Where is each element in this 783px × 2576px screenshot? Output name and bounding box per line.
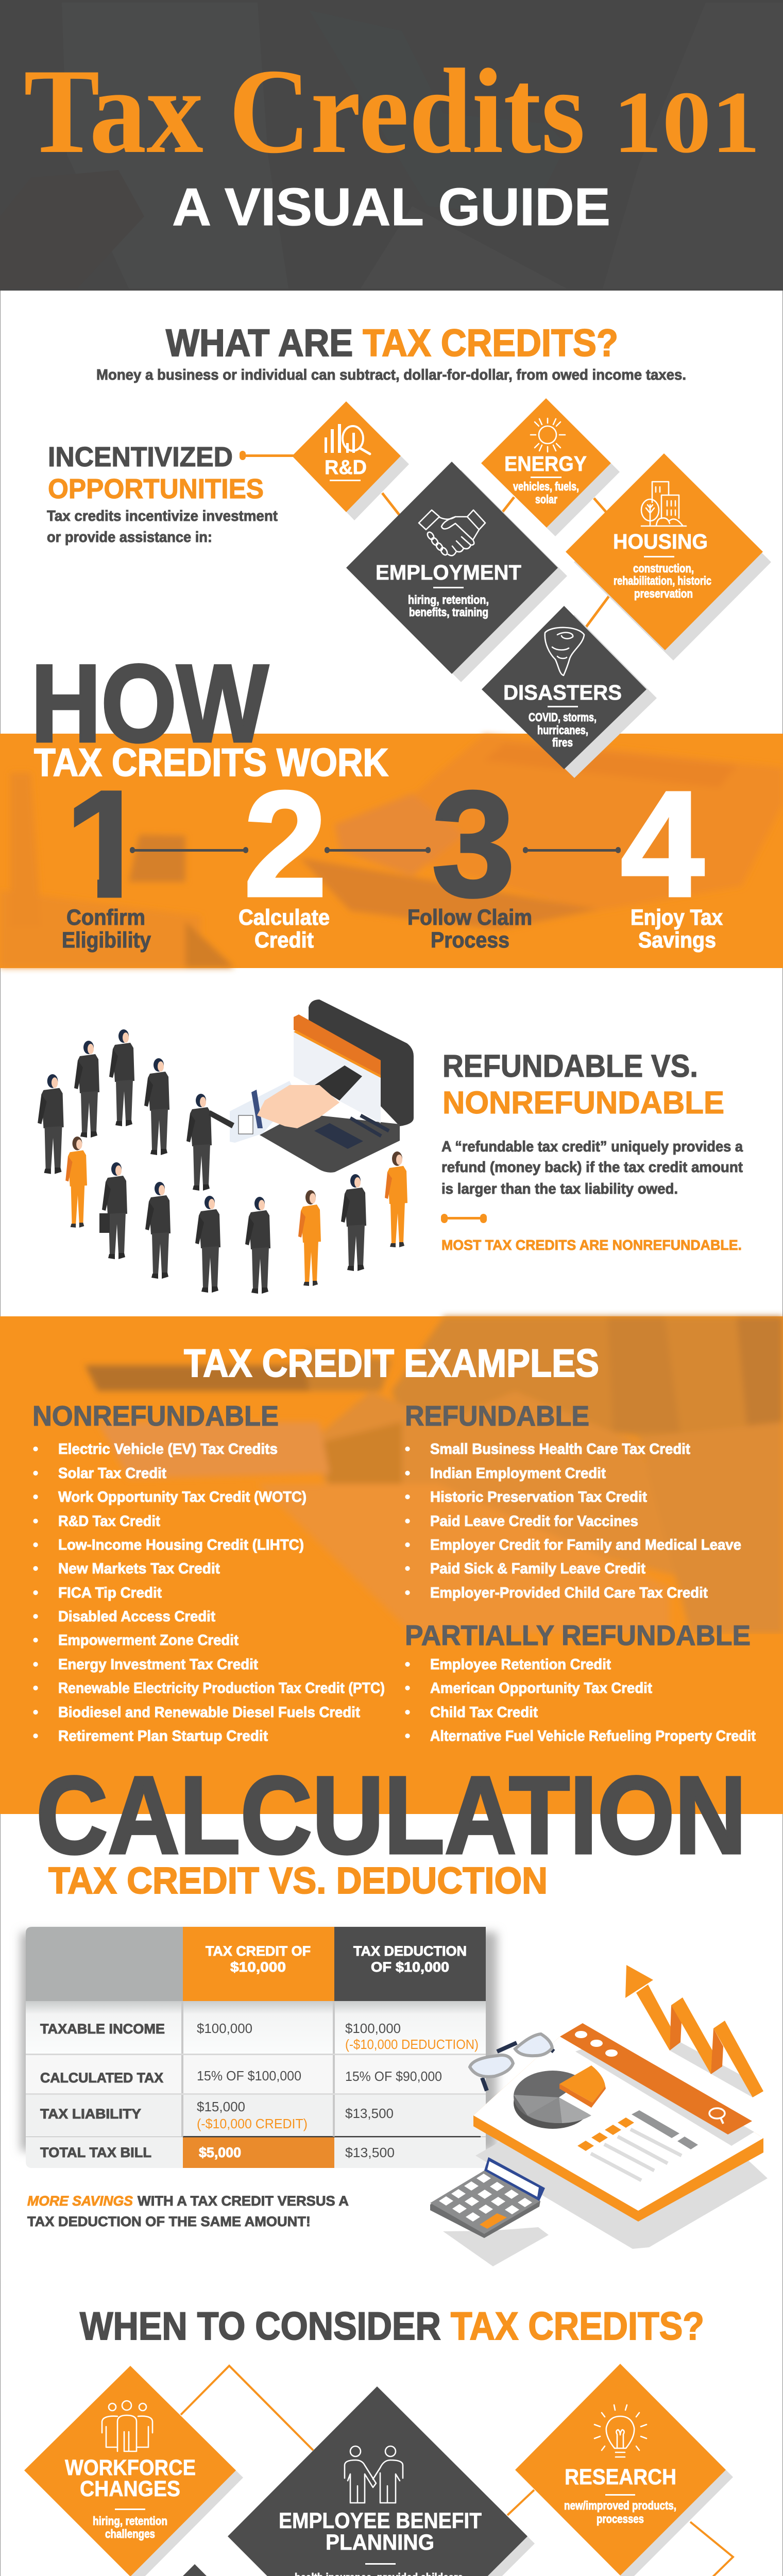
- diamond: energy: [481, 398, 620, 536]
- list: nonrefundable: New Markets Tax Credit: [58, 1561, 220, 1577]
- table header: $10,000: [230, 1959, 286, 1975]
- list: refundable: •: [405, 1537, 410, 1553]
- list: nonrefundable: Empowerment Zone Credit: [58, 1632, 239, 1649]
- subheading: TAX CREDITS WORK: [34, 741, 388, 785]
- illustration: hand from tablet with people: [38, 999, 414, 1294]
- description: [441, 1139, 743, 1197]
- heading: NONREFUNDABLE: [442, 1085, 724, 1120]
- diamond: employee benefit planning: EMPLOYEE BENEFIT: [279, 2509, 482, 2533]
- person 10: [245, 1197, 270, 1294]
- row: tax liability: $15,000: [197, 2099, 245, 2114]
- table header: TAX DEDUCTION: [353, 1943, 467, 1959]
- diamond: employee benefit planning: PLANNING: [326, 2530, 434, 2555]
- title: Tax: [24, 44, 203, 179]
- list: nonrefundable: •: [33, 1704, 38, 1721]
- list: refundable: •: [405, 1441, 410, 1458]
- diamond: housing: preservation: [634, 587, 693, 600]
- list: refundable: Indian Employment Credit: [430, 1465, 606, 1482]
- list: nonrefundable: Renewable Electricity Production Tax Credit (PTC): [58, 1680, 385, 1697]
- incentivized description: or provide assistance in:: [47, 529, 212, 546]
- list: nonrefundable: •: [33, 1608, 38, 1625]
- step 2: Calculate: [239, 905, 330, 930]
- list: nonrefundable: Solar Tax Credit: [58, 1465, 166, 1482]
- step 4: 4: [621, 760, 705, 928]
- connector from heading: [240, 451, 294, 460]
- incentivized description: Tax credits incentivize investment: [47, 508, 278, 524]
- step 1: [63, 790, 151, 953]
- subtitle: A VISUAL GUIDE: [172, 177, 610, 236]
- step 3: 3: [432, 760, 515, 928]
- row: calculated tax: CALCULATED TAX: [40, 2070, 163, 2086]
- icon: workforce: [102, 2401, 152, 2451]
- connector 3-4: [523, 847, 621, 853]
- row: tax liability: (-$10,000 CREDIT): [197, 2116, 308, 2131]
- icon: sun: [531, 418, 565, 452]
- page side border left: [0, 291, 1, 2576]
- connector lines between diamonds: [382, 493, 609, 630]
- column separators: [26, 2001, 486, 2137]
- incentivized heading: INCENTIVIZED: [48, 442, 233, 472]
- diamond: employment: benefits, training: [409, 605, 488, 619]
- list: nonrefundable: •: [33, 1513, 38, 1530]
- list: nonrefundable: Retirement Plan Startup Credit: [58, 1728, 268, 1744]
- diamond: research: RESEARCH: [565, 2465, 676, 2489]
- diamond: disasters: fires: [552, 736, 573, 749]
- icon: bar chart with magnifier: [325, 424, 370, 454]
- list: nonrefundable: Work Opportunity Tax Credit (WOTC): [58, 1489, 307, 1505]
- person 7: [99, 1162, 127, 1259]
- list: refundable: •: [405, 1489, 410, 1505]
- person 3: [109, 1029, 134, 1126]
- list: partially refundable: American Opportunity Tax Credit: [430, 1680, 652, 1697]
- list: nonrefundable: NONREFUNDABLE: [32, 1400, 279, 1432]
- icon: handshake: [419, 510, 485, 556]
- diamond: research: [515, 2364, 733, 2576]
- diamond: housing: construction,: [633, 562, 694, 575]
- row: calculated tax: 15% OF $90,000: [345, 2069, 442, 2084]
- diamond: workforce changes: WORKFORCE: [65, 2455, 196, 2480]
- incentivized heading: [48, 442, 264, 504]
- step 3: [407, 760, 532, 953]
- list: refundable: Paid Sick & Family Leave Credit: [430, 1561, 645, 1577]
- incentivized heading: OPPORTUNITIES: [48, 473, 264, 504]
- list: refundable: •: [405, 1465, 410, 1482]
- diamond: workforce changes: CHANGES: [80, 2477, 180, 2501]
- list: nonrefundable: •: [33, 1537, 38, 1553]
- icon: buildings: [641, 482, 686, 526]
- diamond: employee benefit planning: [228, 2386, 535, 2576]
- row: taxable income: (-$10,000 DEDUCTION): [345, 2037, 479, 2052]
- calculator: [430, 2157, 549, 2266]
- row: tax liability: [26, 2095, 486, 2137]
- list: nonrefundable: •: [33, 1465, 38, 1482]
- panel: when to consider tax credits: [24, 2304, 733, 2576]
- diamond: employment: [346, 462, 567, 682]
- list: partially refundable: [405, 1619, 756, 1744]
- person 4: [144, 1058, 169, 1155]
- subheading: TAX CREDIT VS. DEDUCTION: [48, 1860, 548, 1902]
- panel: tax credit examples: [0, 1316, 783, 1814]
- incentivized description: [47, 508, 278, 546]
- list: refundable: [405, 1400, 741, 1601]
- diamond: employment: EMPLOYMENT: [376, 561, 521, 584]
- person 6: [65, 1137, 87, 1228]
- list: refundable: Employer Credit for Family and Medical Leave: [430, 1537, 741, 1553]
- list: refundable: Paid Leave Credit for Vaccines: [430, 1513, 638, 1530]
- person 11: [298, 1190, 321, 1286]
- diamond: research: processes: [597, 2512, 644, 2526]
- row: total tax bill: $13,500: [345, 2145, 395, 2160]
- step 3: Process: [431, 928, 509, 953]
- list: refundable: •: [405, 1585, 410, 1601]
- step 1: 1: [65, 759, 149, 929]
- list: nonrefundable: Electric Vehicle (EV) Tax Credits: [58, 1441, 278, 1458]
- heading: WHAT ARE TAX CREDITS?: [166, 321, 618, 364]
- heading: [442, 1048, 724, 1120]
- description: refund (money back) if the tax credit amount: [441, 1159, 743, 1176]
- diamond: research: new/improved products,: [564, 2499, 676, 2512]
- list: partially refundable: Child Tax Credit: [430, 1704, 538, 1721]
- list: partially refundable: Employee Retention Credit: [430, 1656, 611, 1673]
- step 2: Credit: [254, 928, 314, 953]
- hand with money: [230, 1065, 362, 1143]
- diamond: energy: vehicles, fuels,: [513, 480, 579, 493]
- diamond: energy: ENERGY: [504, 452, 587, 476]
- diamond: disasters: DISASTERS: [503, 681, 622, 704]
- panel: how tax credits work: [0, 642, 783, 968]
- list: nonrefundable: •: [33, 1680, 38, 1697]
- description: A “refundable tax credit” uniquely provides a: [441, 1139, 743, 1155]
- diamond: workforce changes: hiring, retention: [93, 2514, 167, 2528]
- row: total tax bill: $5,000: [199, 2145, 241, 2160]
- diamond: disasters: [482, 606, 657, 778]
- row: taxable income: TAXABLE INCOME: [40, 2021, 165, 2037]
- row: calculated tax: [26, 2055, 486, 2094]
- diamond: disasters: hurricanes,: [537, 723, 588, 737]
- background band: [0, 734, 783, 968]
- list: nonrefundable: Energy Investment Tax Credit: [58, 1656, 258, 1673]
- person 1: [38, 1074, 64, 1174]
- diamond: housing: HOUSING: [613, 530, 708, 553]
- diamond: housing: rehabilitation, historic: [614, 574, 711, 587]
- person 2: [74, 1041, 99, 1138]
- row: taxable income: $100,000: [345, 2021, 401, 2036]
- list: refundable: Historic Preservation Tax Credit: [430, 1489, 647, 1505]
- list: partially refundable: •: [405, 1728, 410, 1744]
- row: calculated tax: 15% OF $100,000: [197, 2068, 301, 2083]
- callout: WITH A TAX CREDIT VERSUS A: [138, 2193, 349, 2209]
- callout: TAX DEDUCTION OF THE SAME AMOUNT!: [27, 2214, 311, 2229]
- table: [21, 1927, 497, 2168]
- table header: TAX CREDIT OF: [206, 1943, 311, 1959]
- list: nonrefundable: FICA Tip Credit: [58, 1585, 162, 1601]
- diamond: R&D: R&D: [325, 456, 367, 479]
- list: nonrefundable: R&D Tax Credit: [58, 1513, 160, 1530]
- step 1: Eligibility: [62, 928, 151, 953]
- title: 101: [613, 74, 760, 172]
- list: nonrefundable: •: [33, 1656, 38, 1673]
- panel: header: [0, 0, 783, 291]
- diamond: site expansion: [97, 2564, 298, 2576]
- row: taxable income: [26, 2001, 486, 2054]
- row: tax liability: $13,500: [345, 2106, 394, 2121]
- row: taxable income: $100,000: [197, 2021, 252, 2036]
- definition text: Money a business or individual can subtract, dollar-for-dollar, from owed income taxes.: [96, 367, 686, 383]
- connector 2-3: [325, 847, 431, 853]
- step 4: Savings: [638, 928, 716, 953]
- diamond: housing: [566, 453, 771, 660]
- list: partially refundable: PARTIALLY REFUNDABLE: [405, 1619, 751, 1651]
- step 1: Confirm: [66, 905, 145, 930]
- diamond: employment: hiring, retention,: [408, 593, 489, 606]
- person 5: [186, 1094, 234, 1191]
- list: partially refundable: Alternative Fuel Vehicle Refueling Property Credit: [430, 1728, 756, 1744]
- step 4: Enjoy Tax: [631, 905, 723, 930]
- table header: OF $10,000: [371, 1959, 449, 1975]
- list: refundable: Employer-Provided Child Care Tax Credit: [430, 1585, 708, 1601]
- heading: WHEN TO CONSIDER TAX CREDITS?: [80, 2304, 704, 2348]
- icon: two people: [345, 2446, 403, 2503]
- list: partially refundable: •: [405, 1680, 410, 1697]
- document rows: [577, 2110, 698, 2180]
- list: nonrefundable: •: [33, 1585, 38, 1601]
- step 3: Follow Claim: [407, 905, 532, 930]
- person 13: [385, 1151, 407, 1247]
- list: partially refundable: •: [405, 1704, 410, 1721]
- row: total tax bill: [26, 2136, 486, 2168]
- background photo band: [0, 1316, 783, 1814]
- description: is larger than the tax liability owed.: [441, 1181, 678, 1197]
- tablet: [260, 999, 414, 1173]
- list: nonrefundable: Low-Income Housing Credit (LIHTC): [58, 1537, 304, 1553]
- list: nonrefundable: •: [33, 1561, 38, 1577]
- list: nonrefundable: Biodiesel and Renewable Diesel Fuels Credit: [58, 1704, 360, 1721]
- list: nonrefundable: •: [33, 1728, 38, 1744]
- glasses: [470, 2034, 554, 2091]
- callout: [27, 2193, 349, 2229]
- panel: calculation: [21, 1754, 768, 2266]
- row: tax liability: TAX LIABILITY: [40, 2106, 141, 2122]
- diamond: workforce changes: challenges: [105, 2527, 155, 2540]
- person 12: [341, 1174, 366, 1271]
- list: nonrefundable: •: [33, 1441, 38, 1458]
- step 2: 2: [244, 760, 327, 928]
- list: refundable: Small Business Health Care Tax Credit: [430, 1441, 690, 1458]
- table header: [26, 1927, 486, 2001]
- title: Credits: [229, 44, 585, 179]
- icon: light bulb: [594, 2405, 646, 2457]
- panel: refundable vs nonrefundable: [38, 999, 743, 1294]
- list: refundable: •: [405, 1561, 410, 1577]
- diamond: R&D: [292, 401, 409, 520]
- icon: tornado: [545, 628, 584, 675]
- illustration: document with chart: [430, 1965, 768, 2266]
- diamond: energy: solar: [535, 493, 557, 506]
- connector lines: [181, 2366, 733, 2576]
- list: partially refundable: •: [405, 1656, 410, 1673]
- list: nonrefundable: [32, 1400, 385, 1744]
- list: refundable: REFUNDABLE: [405, 1400, 589, 1432]
- person 8: [145, 1182, 171, 1279]
- row: total tax bill: TOTAL TAX BILL: [40, 2145, 151, 2160]
- connector 1-2: [130, 847, 248, 853]
- list: nonrefundable: •: [33, 1489, 38, 1505]
- growth arrow: [625, 1965, 763, 2097]
- page side border right: [782, 291, 783, 2576]
- diamond: workforce changes: [24, 2366, 243, 2576]
- person 9: [195, 1196, 220, 1293]
- callout: MORE SAVINGS: [27, 2193, 133, 2209]
- search bar: [560, 2023, 752, 2134]
- pie chart: [514, 2065, 610, 2129]
- panel: what are tax credits: [47, 321, 771, 682]
- list: nonrefundable: •: [33, 1632, 38, 1649]
- heading: TAX CREDIT EXAMPLES: [184, 1342, 599, 1385]
- list: nonrefundable: Disabled Access Credit: [58, 1608, 215, 1625]
- heading: REFUNDABLE VS.: [442, 1048, 698, 1083]
- diamond: disasters: COVID, storms,: [529, 710, 597, 724]
- callout: MOST TAX CREDITS ARE NONREFUNDABLE.: [441, 1237, 742, 1253]
- title: [24, 44, 760, 179]
- list: refundable: •: [405, 1513, 410, 1530]
- divider connector: [441, 1214, 487, 1223]
- HOW heading: HOW: [31, 642, 268, 765]
